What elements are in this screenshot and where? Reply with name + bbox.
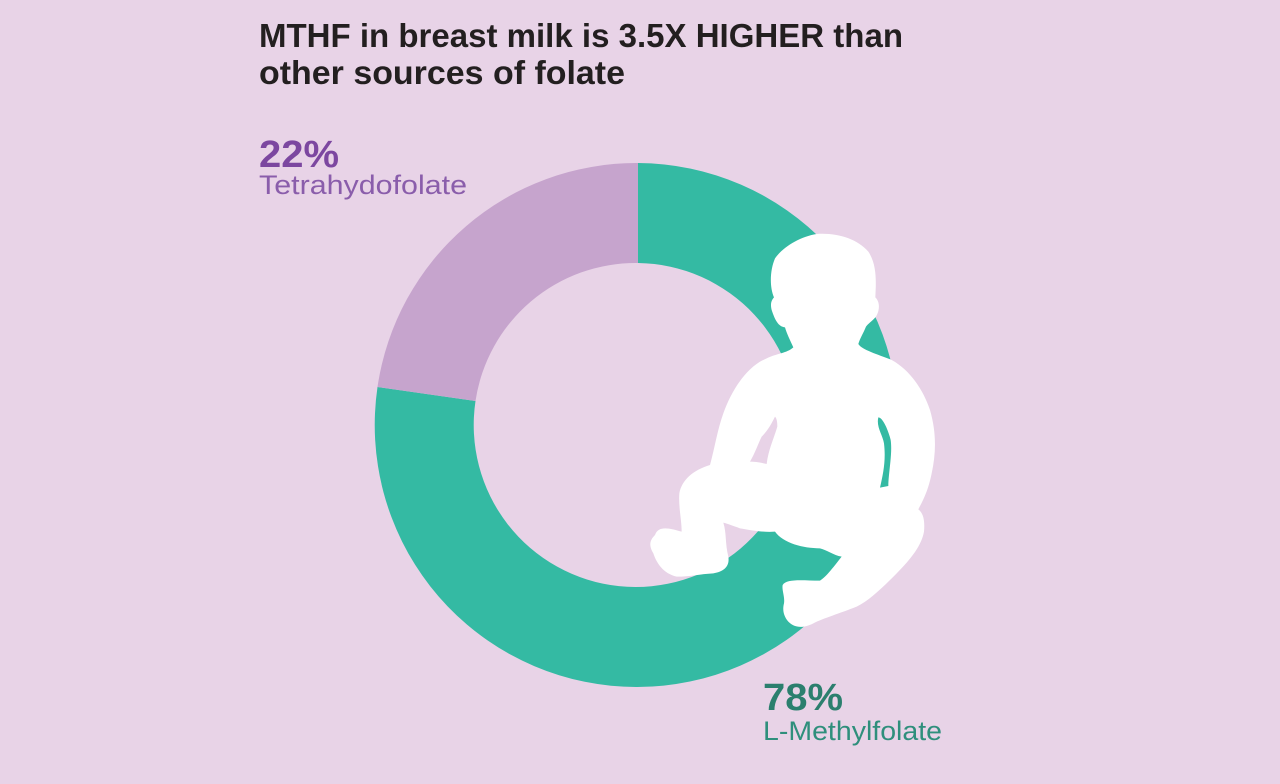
title: MTHF in breast milk is 3.5X HIGHER than — [259, 17, 903, 54]
label: 78% L-Methylfolate: L-Methylfolate — [763, 716, 942, 746]
segment: Tetrahydofolate 22% — [378, 163, 638, 401]
segment: L-Methylfolate 78% — [375, 163, 899, 687]
label: 22% Tetrahydofolate: 22% — [259, 134, 339, 176]
label: 22% Tetrahydofolate — [259, 134, 467, 200]
icon: baby silhouette — [650, 234, 935, 627]
label: 78% L-Methylfolate: 78% — [763, 677, 843, 719]
title — [259, 17, 903, 91]
donut chart — [375, 163, 899, 687]
title: other sources of folate — [259, 54, 625, 91]
label: 78% L-Methylfolate — [763, 677, 942, 746]
label: 22% Tetrahydofolate: Tetrahydofolate — [259, 170, 467, 200]
